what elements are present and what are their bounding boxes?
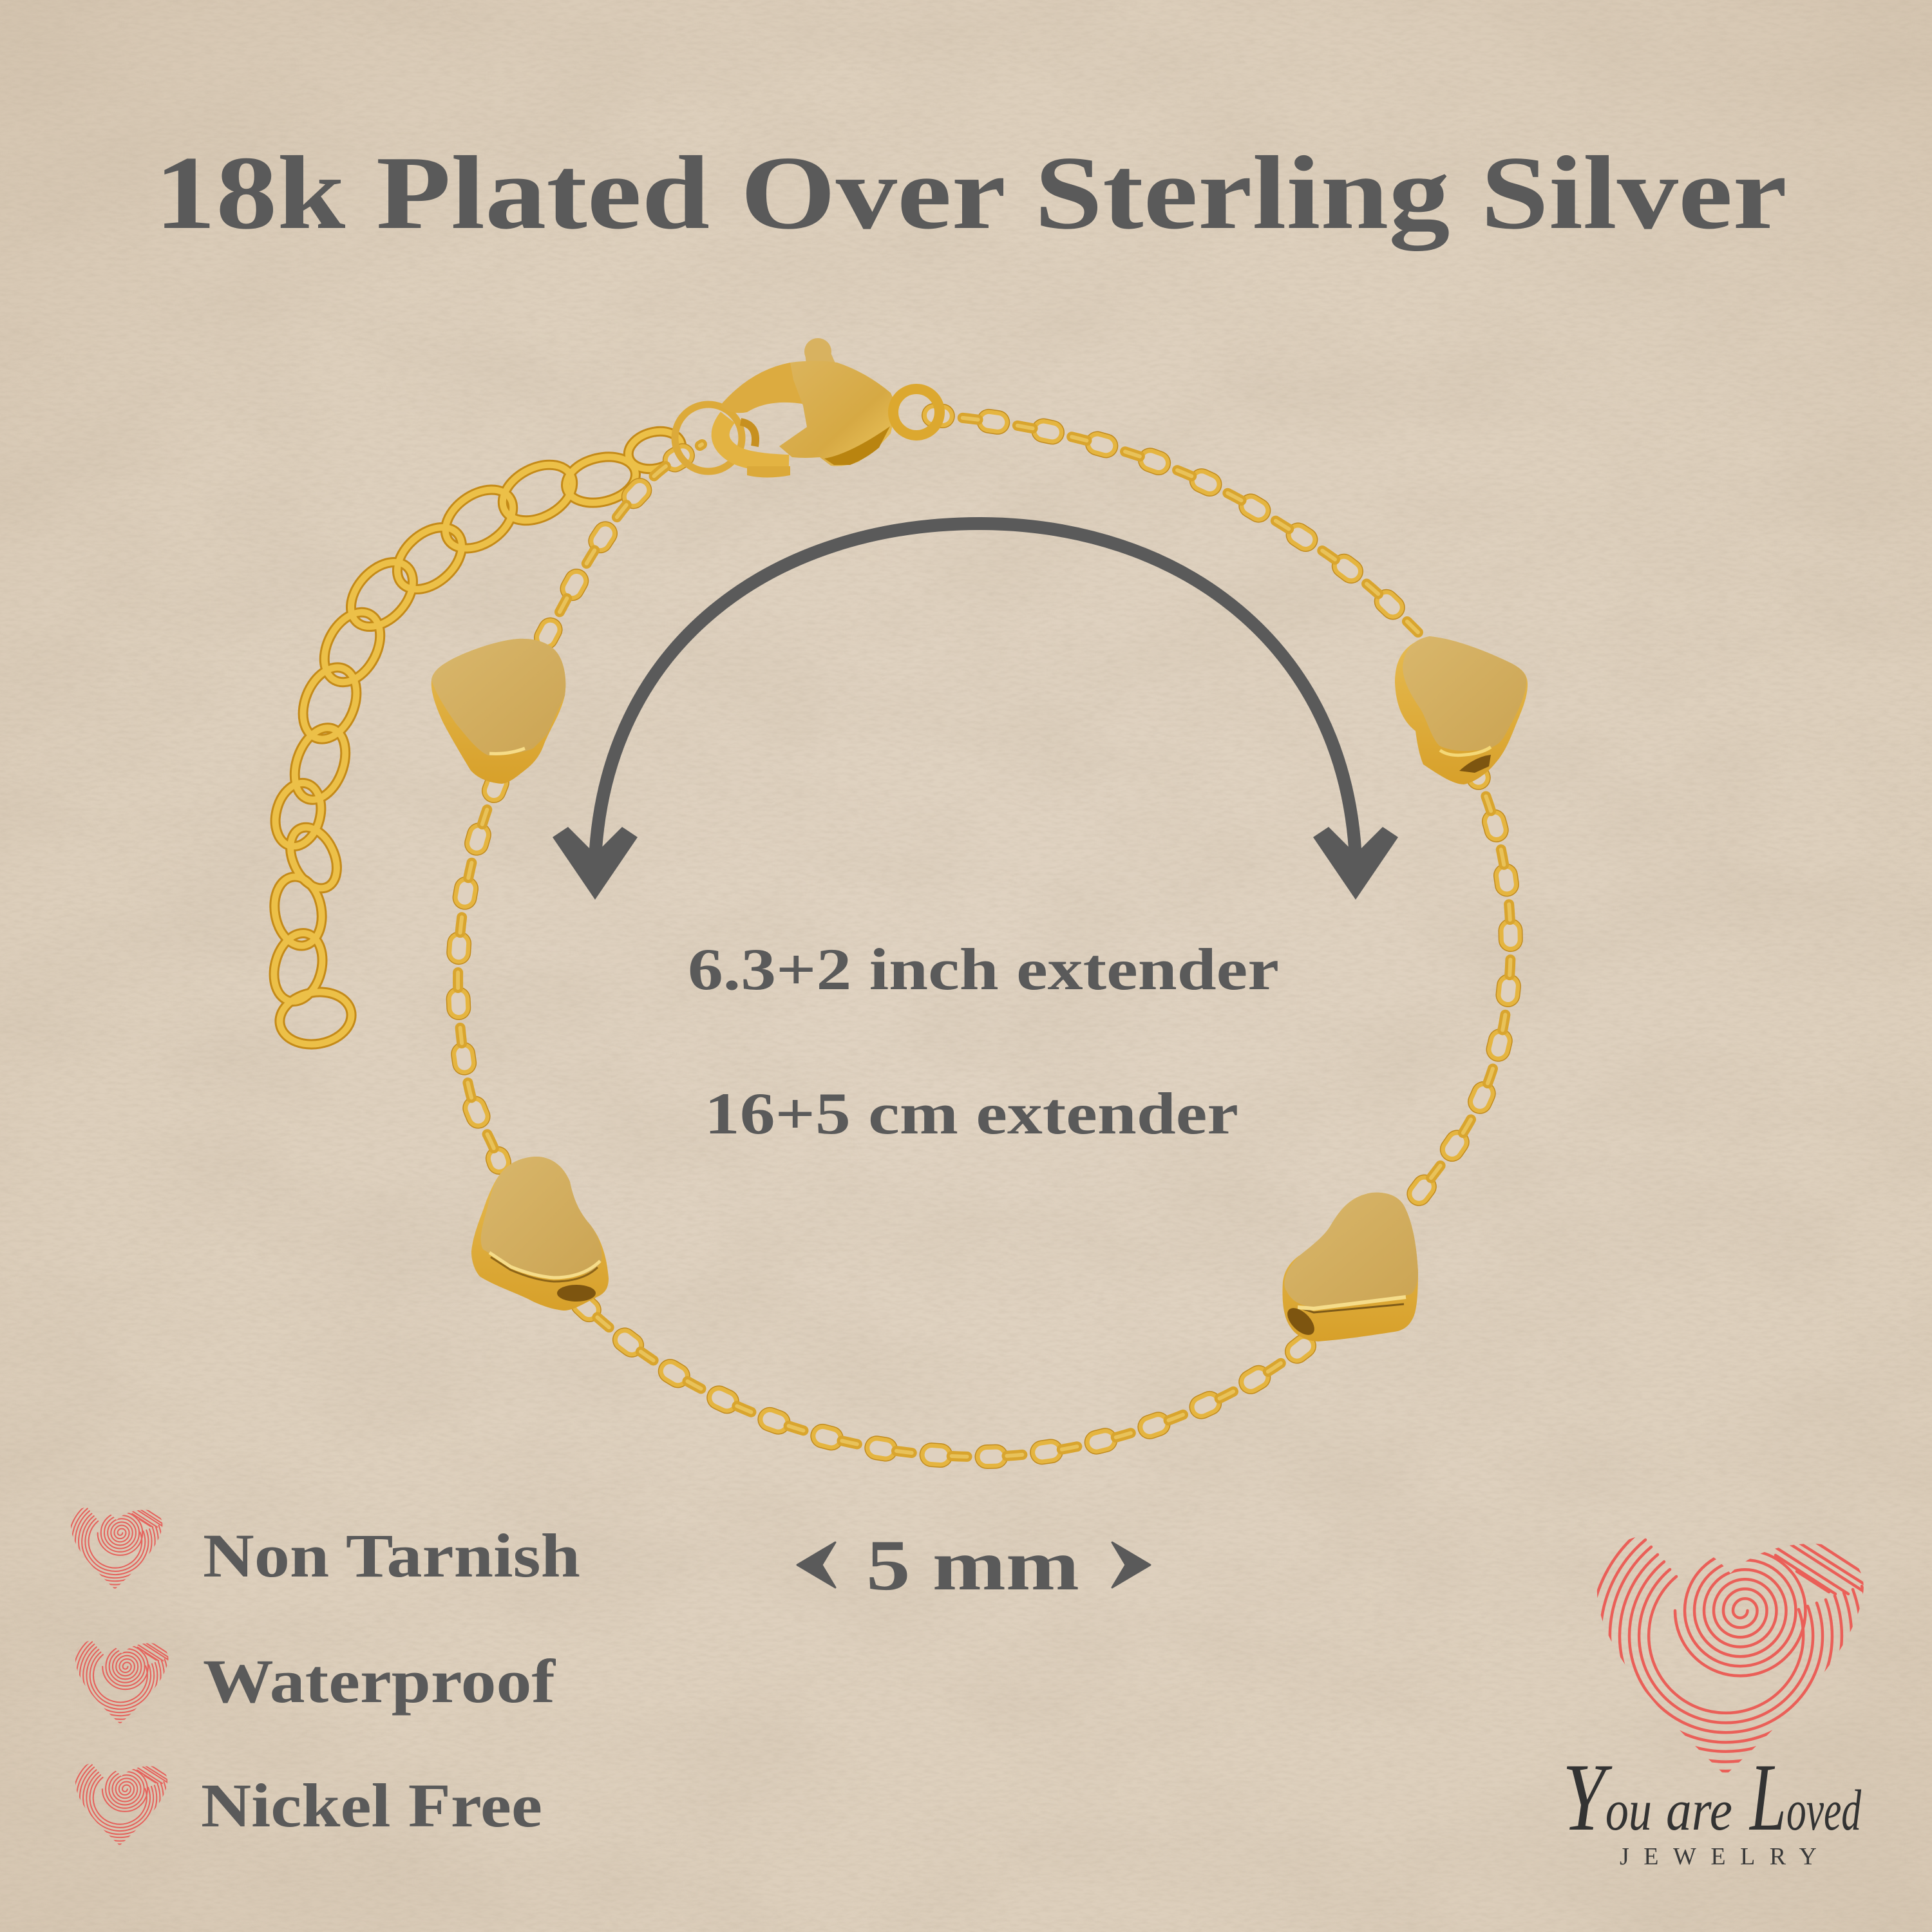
logo: script wordmark: Loved	[1749, 1744, 1862, 1851]
clasp hook	[720, 363, 806, 413]
feature: waterproof: Waterproof	[203, 1647, 556, 1716]
arrowhead: left	[553, 827, 638, 900]
icon: fingerprint heart 1	[55, 1496, 175, 1601]
heart charm: bottom left	[471, 1157, 609, 1311]
logo: jewelry: JEWELRY	[1620, 1843, 1817, 1870]
length in centimetres: 16+5 cm extender	[705, 1081, 1238, 1146]
length in inches: 6.3+2 inch extender	[688, 936, 1279, 1002]
thick jump ring	[721, 417, 790, 478]
lobster clasp	[675, 338, 940, 478]
bracelet photo illustration	[267, 338, 1528, 1457]
heart charm: top right	[1395, 636, 1528, 784]
main cable chain	[458, 415, 1511, 1457]
feature: nickel free: Nickel Free	[201, 1771, 542, 1840]
brand logo	[1552, 1502, 1900, 1870]
extender chain	[267, 426, 686, 1050]
icon: fingerprint heart 3	[60, 1752, 180, 1857]
title: 18k Plated Over Sterling Silver	[155, 135, 1787, 251]
heart charm: top left	[431, 639, 565, 784]
logo: script wordmark: You	[1562, 1744, 1652, 1851]
arrowhead: right	[1313, 827, 1398, 900]
clasp body	[779, 361, 895, 466]
width label: 5 mm	[866, 1526, 1079, 1605]
measurement arrow	[553, 524, 1398, 900]
logo: script wordmark	[1562, 1744, 1862, 1851]
icon: fingerprint heart 2	[60, 1629, 181, 1736]
chevron: right	[1112, 1542, 1150, 1587]
clasp knob	[804, 338, 836, 365]
feature: non tarnish: Non Tarnish	[203, 1521, 580, 1590]
charm width measure	[797, 1526, 1150, 1605]
chevron: left	[797, 1542, 835, 1587]
feature list	[55, 1496, 580, 1857]
heart charm: bottom right	[1282, 1193, 1418, 1341]
small connector ring	[893, 389, 940, 435]
thin jump ring	[675, 404, 742, 471]
logo: script wordmark: are	[1666, 1779, 1732, 1842]
logo: fingerprint heart	[1552, 1502, 1900, 1809]
